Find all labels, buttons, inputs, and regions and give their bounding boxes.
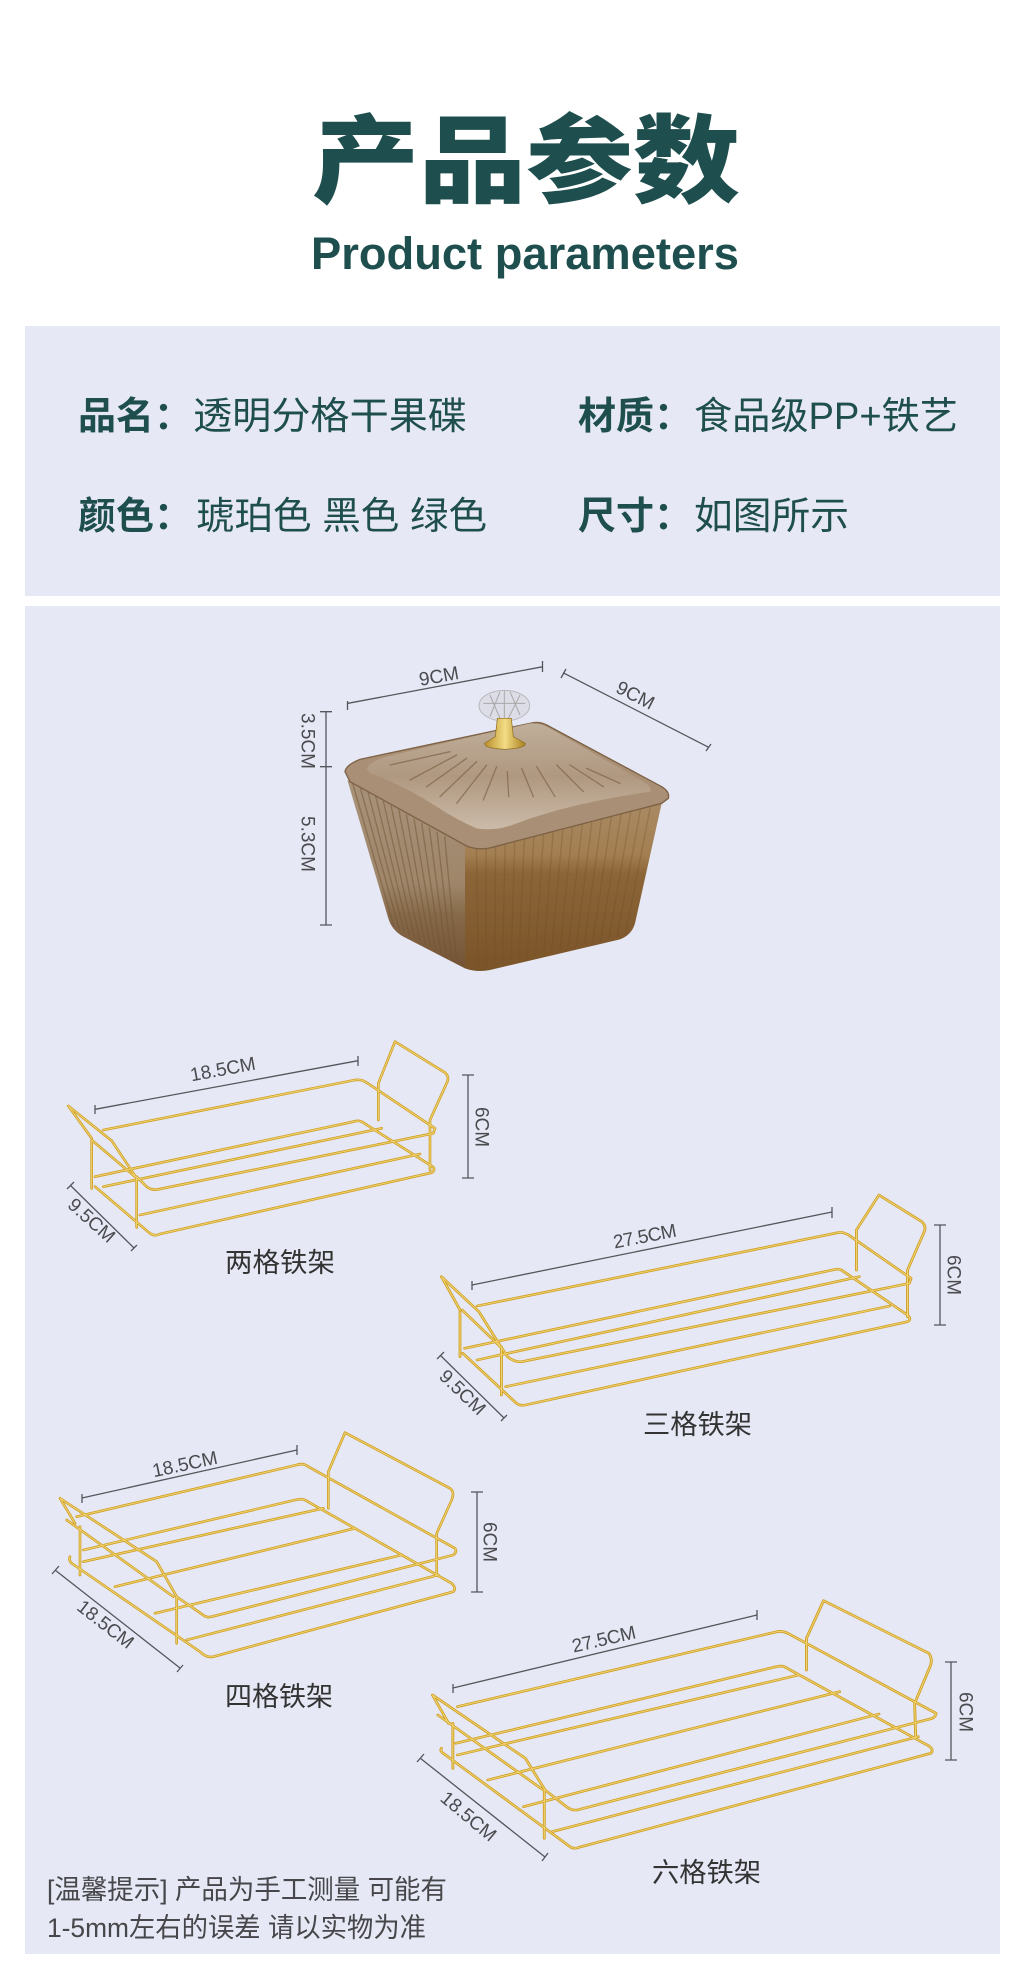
- spec value: material: 食品级PP+铁艺: [694, 396, 958, 438]
- rack: four-grid iron stand: [52, 1433, 500, 1714]
- dimension: width: 18.5CM: [436, 1788, 500, 1846]
- wire frame: [432, 1601, 936, 1848]
- spec label: size: 尺寸：: [578, 496, 692, 538]
- wire frame: [441, 1195, 925, 1405]
- spec label: name: 品名：: [78, 396, 192, 438]
- subtitle: Product parameters: [311, 228, 739, 279]
- dimension: width: [417, 1754, 548, 1861]
- caption: 两格铁架: [225, 1241, 335, 1280]
- bowl right ribs: [476, 807, 650, 968]
- dimension: width: [435, 1352, 507, 1421]
- dimension: length: [472, 1207, 832, 1290]
- dimension: bowl width: [348, 661, 543, 710]
- knob crystal: [479, 690, 530, 721]
- bowl right face: [465, 803, 662, 971]
- dimension: length: [453, 1610, 757, 1693]
- dimension: length: 18.5CM: [189, 1054, 257, 1086]
- spec value: colour: 琥珀色 黑色 绿色: [196, 496, 487, 538]
- lid rim: [345, 722, 669, 849]
- dimension: width: [52, 1566, 183, 1672]
- wire frame: [68, 1042, 448, 1235]
- dimension: height: [945, 1662, 976, 1760]
- dimension: length: 27.5CM: [612, 1221, 678, 1253]
- note line 1: [温馨提示] 产品为手工测量 可能有: [47, 1875, 447, 1905]
- panel: dimensions: [25, 606, 1000, 1954]
- dimension: bowl height: [296, 767, 332, 925]
- dimension: width: 9.5CM: [63, 1194, 119, 1248]
- lid radial ribs: [390, 752, 620, 803]
- knob facets: [483, 691, 525, 719]
- caption: 六格铁架: [652, 1851, 761, 1890]
- lid dome: [367, 723, 651, 829]
- spec value: size: 如图所示: [694, 496, 849, 538]
- product: amber bowl with lid: [345, 690, 669, 971]
- caption: 三格铁架: [643, 1403, 752, 1442]
- dimension: length: [95, 1054, 358, 1114]
- dimension: length: [82, 1445, 297, 1503]
- spec value: name: 透明分格干果碟: [193, 396, 467, 438]
- panel: product specifications: [25, 326, 1000, 596]
- caption: 四格铁架: [225, 1675, 333, 1714]
- dimension: height: [934, 1225, 964, 1325]
- dimension: bowl depth: [561, 669, 711, 751]
- dimension: length: 27.5CM: [570, 1622, 638, 1658]
- dimension: height: 6CM: [470, 1107, 492, 1147]
- dimension: height: [471, 1492, 500, 1592]
- note line 2: 1-5mm左右的误差 请以实物为准: [47, 1913, 426, 1943]
- knob gold stem: [485, 718, 525, 749]
- dimension: height: 6CM: [478, 1522, 500, 1562]
- dimension: bowl depth: 9CM: [612, 678, 658, 714]
- rack: six-grid iron stand: [417, 1601, 976, 1890]
- dimension: lid height: [296, 712, 332, 769]
- dimension: width: 18.5CM: [73, 1596, 137, 1654]
- wire frame: [60, 1433, 456, 1657]
- rack: two-grid iron stand: [63, 1042, 492, 1280]
- spec label: colour: 颜色：: [78, 496, 192, 538]
- title: 产品参数: [312, 84, 740, 223]
- dimension: height: [462, 1075, 492, 1178]
- dimension: bowl height: 5.3CM: [296, 816, 318, 872]
- dimension: height: 6CM: [942, 1255, 964, 1295]
- note: measurement disclaimer: [47, 1875, 447, 1943]
- spec label: material: 材质：: [578, 396, 692, 438]
- dimension: width: [63, 1182, 137, 1251]
- dimension: height: 6CM: [954, 1692, 976, 1732]
- dimension: bowl width: 9CM: [417, 663, 461, 691]
- bowl left face: [347, 780, 468, 968]
- bowl ribs: [353, 783, 457, 963]
- dimension: lid height: 3.5CM: [296, 713, 318, 769]
- dimension: length: 18.5CM: [151, 1448, 219, 1482]
- dimension: width: 9.5CM: [435, 1366, 489, 1420]
- rack: three-grid iron stand: [435, 1195, 964, 1442]
